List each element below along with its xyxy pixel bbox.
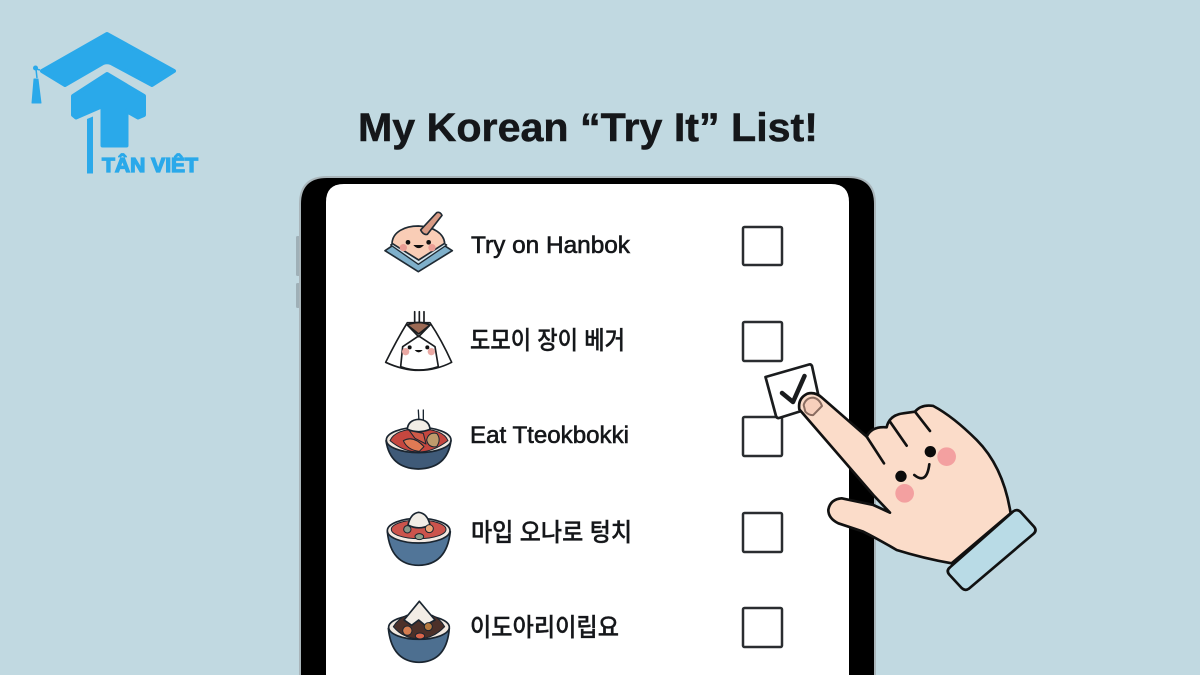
icon: rice ball in hanbok — [386, 312, 452, 370]
row 4 checkbox — [743, 513, 782, 552]
row 3 label: Eat Tteokbokki — [470, 422, 629, 449]
tablet screen — [326, 184, 849, 675]
logo: Tan Viet graduation cap and arrow — [32, 34, 198, 177]
logo wordmark: TÂN VIÊT — [102, 153, 198, 177]
row 1 label: Try on Hanbok — [471, 232, 631, 259]
hand outline — [799, 393, 1011, 563]
row 5 checkbox — [743, 608, 782, 647]
list row 2: Korean label — [386, 312, 782, 370]
row 2 label: 도모이 장이 베거 — [470, 327, 625, 355]
shirt cuff — [948, 510, 1035, 590]
fingernail — [804, 398, 822, 415]
list row 1: Try on Hanbok — [385, 212, 782, 272]
list row 3: Eat Tteokbokki — [386, 410, 782, 469]
row 3 checkbox — [743, 417, 782, 456]
list row 5: Korean label — [388, 601, 782, 662]
icon: tteokbokki bowl — [386, 410, 451, 469]
finger creases — [867, 412, 930, 463]
face — [937, 447, 956, 466]
icon: red soup bowl — [387, 512, 450, 565]
checked box held by finger — [766, 364, 820, 418]
icon: mountain food bowl — [388, 601, 449, 662]
tablet device — [296, 176, 876, 675]
hand with cute face pointing at checkbox — [799, 393, 1035, 590]
row 5 label: 이도아리이립요 — [470, 614, 619, 642]
row 2 checkbox — [743, 322, 782, 361]
check mark — [782, 376, 804, 402]
title: My Korean “Try It” List! — [358, 106, 818, 150]
icon: hanbok dumpling — [385, 212, 452, 272]
list row 4: Korean label — [387, 512, 782, 565]
row 1 checkbox — [743, 227, 782, 265]
row 4 label: 마입 오나로 텅치 — [471, 519, 632, 547]
